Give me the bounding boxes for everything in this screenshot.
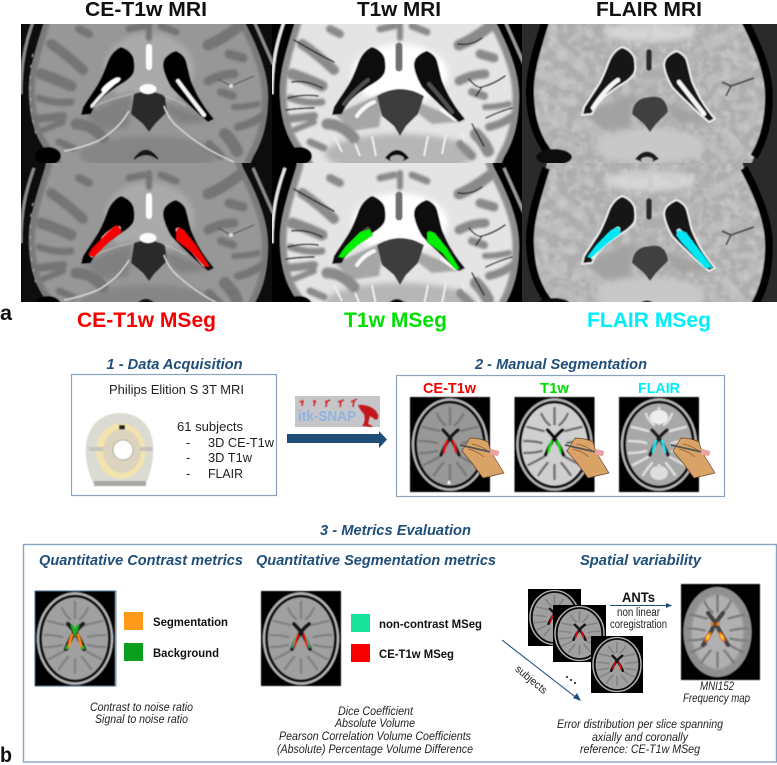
icon: itk-SNAP logo [295,396,380,427]
caption: MNI152 frequency map [683,681,751,705]
label: T1w: T1w [540,380,569,397]
icon: hand with pencil, CE-T1w [460,438,504,478]
heading: contrast metrics: Quantitative Contrast metrics [39,552,243,569]
column: quantitative contrast metrics [35,552,243,726]
segmentation: green [338,229,460,269]
label: subjects: subjects [513,663,550,697]
caption: error distribution: Error distribution per slice spanning [557,719,724,731]
caption: segmentation metrics list: Absolute Volume [334,718,415,730]
heading: segmentation metrics: Quantitative Segmentation metrics [256,552,496,569]
caption: MNI152 frequency map: Frequency map [683,693,751,705]
image: CE-T1w MRI [21,24,272,163]
image: FLAIR MRI with cyan segmentation [522,163,777,302]
legend: CE-T1w MSeg [351,644,454,662]
caption: segmentation metrics list: Dice Coefficient [338,706,414,718]
list: subjects and sequences [177,419,275,481]
legend: segmentation [124,612,228,630]
label: CE-T1w MSeg: CE-T1w MSeg [77,309,216,332]
list: subjects and sequences: FLAIR [208,466,243,481]
segmentation: cyan [587,227,713,268]
arrow: ANTs coregistration [610,603,672,608]
image: FLAIR MRI [522,24,777,163]
scan: FLAIR with cyan overlay [619,397,699,492]
panel letter a: a [0,302,12,325]
caption: segmentation metrics list: (Absolute) Percentage Volume Difference [277,744,473,756]
image: T1w MRI with green segmentation [272,163,522,302]
scan: non-contrast and CE-T1w overlay [261,591,341,686]
caption: segmentation metrics list: Pearson Correlation Volume Coefficients [279,731,471,743]
label: CE-T1w: CE-T1w [423,380,476,397]
caption: non linear coregistration [610,607,667,631]
scan: CE-T1w with red overlay [410,397,490,492]
legend: non-contrast MSeg: non-contrast MSeg [379,619,482,631]
scan: MNI152 frequency map [681,584,760,680]
legend: segmentation: Segmentation [153,617,228,629]
caption: contrast metrics list: Contrast to noise ratio [90,702,194,714]
scan stack: subject 2 [553,605,606,662]
scan stack: subject 3 [591,636,643,693]
legend: background: Background [153,648,219,660]
caption: non linear coregistration: non linear [617,607,660,619]
column: quantitative segmentation metrics [256,552,496,756]
scan stack: subject 1 [528,589,581,646]
heading: 2 - Manual Segmentation: 2 - Manual Segmentation [474,357,647,373]
heading: spatial variability: Spatial variability [580,552,702,569]
panel: manual segmentation [396,376,724,496]
caption: MNI152 frequency map: MNI152 [700,681,734,693]
list: subjects and sequences: - [186,450,190,465]
list: subjects and sequences: - [186,435,190,450]
section a: MRI comparison [0,0,777,332]
arrow: subjects [502,640,581,701]
label: T1w MSeg: T1w MSeg [344,309,447,332]
scan: segmentation and background overlay [35,591,116,686]
image: T1w MRI [272,24,522,163]
column: spatial variability [502,552,760,756]
caption: non linear coregistration: coregistration [610,619,667,631]
arrow: acquisition to segmentation [287,431,387,448]
heading: 1 - Data Acquisition: 1 - Data Acquisition [106,357,243,373]
label: FLAIR: FLAIR [638,380,680,397]
caption: contrast metrics list: Signal to noise ratio [95,714,189,726]
caption: contrast metrics list [90,702,194,726]
scan: T1w with green overlay [514,397,594,492]
caption: segmentation metrics list [277,706,473,756]
dots: more subjects [566,676,576,684]
panel: metrics evaluation [24,544,776,762]
list: subjects and sequences: 3D CE-T1w [208,435,275,450]
caption: error distribution [557,719,724,756]
list: subjects and sequences: 3D T1w [208,450,253,465]
list: subjects and sequences: - [186,466,190,481]
caption: error distribution: reference: CE-T1w MSeg [580,744,701,756]
label: FLAIR MSeg: FLAIR MSeg [587,309,711,332]
caption: error distribution: axially and coronally [592,732,689,744]
segmentation: red [88,225,210,267]
image: CE-T1w MRI with red segmentation [21,163,272,302]
list: subjects and sequences: 61 subjects [177,419,243,434]
panel: data acquisition [72,374,276,496]
heading: 3 - Metrics Evaluation: 3 - Metrics Evaluation [320,523,471,539]
icon: itk-SNAP logo: itk-SNAP [298,408,356,425]
legend: non-contrast MSeg [351,614,482,632]
icon: MRI scanner [86,413,153,486]
label: ANTs: ANTs [622,590,655,605]
scanner name: Philips Elition S 3T MRI [109,382,244,397]
legend: background [124,643,219,661]
legend: CE-T1w MSeg: CE-T1w MSeg [379,649,454,661]
icon: hand with pencil, T1w [565,438,609,478]
icon: hand with pencil, FLAIR [671,438,715,478]
